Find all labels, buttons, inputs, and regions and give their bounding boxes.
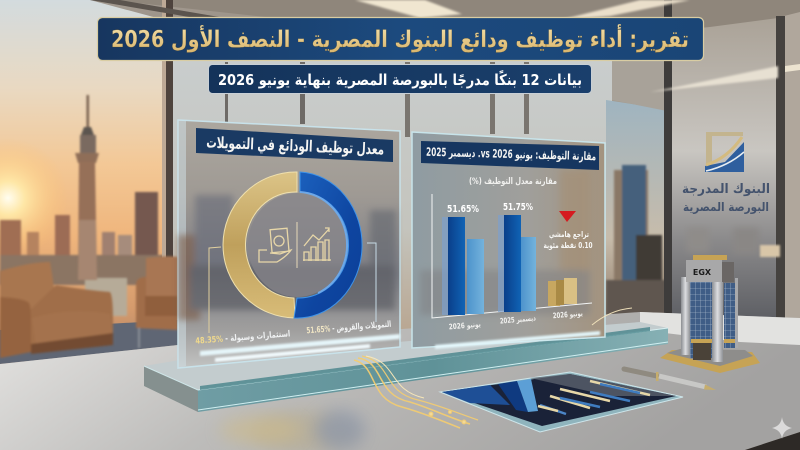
bars: gold change [548, 278, 577, 306]
logo on frosted wall [682, 132, 770, 215]
window mullion [162, 0, 173, 258]
x labels: يونيو 2026 [448, 320, 481, 331]
title banner: تقرير: أداء توظيف ودائع البنوك المصرية - النصف الأول 2026 [111, 23, 689, 53]
sun glow [0, 138, 68, 258]
bar chart [432, 194, 592, 331]
icon: red down triangle [559, 211, 576, 222]
panel: deposit utilisation donut [178, 120, 400, 368]
annotation: marginal decline [544, 230, 593, 250]
ceiling light strips [355, 0, 462, 18]
blue segment: 51.65% [294, 172, 362, 318]
logo text: البنوك المدرجة [682, 182, 770, 197]
right window view [606, 100, 664, 330]
pen [624, 369, 716, 390]
subtitle banner [208, 64, 592, 94]
back windows above panels [225, 62, 228, 122]
right frosted wall [672, 18, 778, 335]
annotation: marginal decline: 0.10 نقطة مئوية [544, 241, 593, 250]
glass base shelf [144, 322, 668, 412]
icon: growth bars [303, 228, 331, 261]
label: loans share: التمويلات والقروض - %51.65 [306, 320, 392, 336]
icon: Cairo Tower [75, 95, 99, 280]
panel heading [421, 141, 599, 170]
centre window panes [172, 60, 612, 340]
leader line: blue [367, 243, 376, 322]
icon: hand holding money [259, 228, 291, 262]
EGX building model: EGX [693, 268, 712, 277]
golden data traces [354, 308, 632, 428]
bar chart: ديسمبر 2025 [499, 313, 536, 326]
chart subtitle: مقارنة معدل التوظيف (%) [469, 177, 557, 187]
icon: corner sparkle [772, 417, 792, 439]
panel: comparison bar chart [412, 132, 605, 349]
donut chart [223, 172, 362, 318]
subtitle banner: بيانات 12 بنكًا مدرجًا بالبورصة المصرية بنهاية يونيو 2026 [218, 69, 582, 89]
title banner [98, 18, 704, 60]
floor [0, 320, 178, 364]
inner disc [248, 193, 346, 297]
gold segment: 48.35% [223, 172, 297, 318]
sofa right [136, 256, 178, 348]
bar chart: يونيو 2026 [552, 309, 583, 320]
leader line: gold [209, 247, 221, 333]
panel heading: معدل توظيف الودائع في التمويلات [206, 133, 384, 160]
bars: December 2025: 51.75% [503, 202, 533, 213]
logo on frosted wall: البورصة المصرية [683, 200, 769, 215]
sky and sunset [0, 0, 172, 365]
glass sheet [178, 120, 400, 368]
sofa left [0, 262, 113, 358]
tablet bars [538, 381, 650, 414]
skyline [0, 192, 172, 316]
blurred furniture on wall [687, 228, 709, 252]
bars: December 2025 [498, 202, 536, 312]
annotation: marginal decline: تراجع هامشي [549, 230, 589, 239]
panel heading [196, 128, 393, 162]
blurred city through the glass [420, 170, 590, 315]
blurred city through the glass [178, 195, 396, 320]
panel heading: مقارنة التوظيف: يونيو 2026 vs. ديسمبر 2025 [426, 145, 596, 164]
label: investments share: استثمارات وسيولة - %48.35 [195, 329, 291, 347]
EGX building model [660, 255, 760, 373]
bars: June 2026 [442, 204, 484, 315]
icon: bank logo mark [705, 132, 744, 172]
tablet on table [440, 372, 683, 432]
table surface [0, 312, 800, 450]
bars: June 2026: 51.65% [447, 204, 479, 215]
